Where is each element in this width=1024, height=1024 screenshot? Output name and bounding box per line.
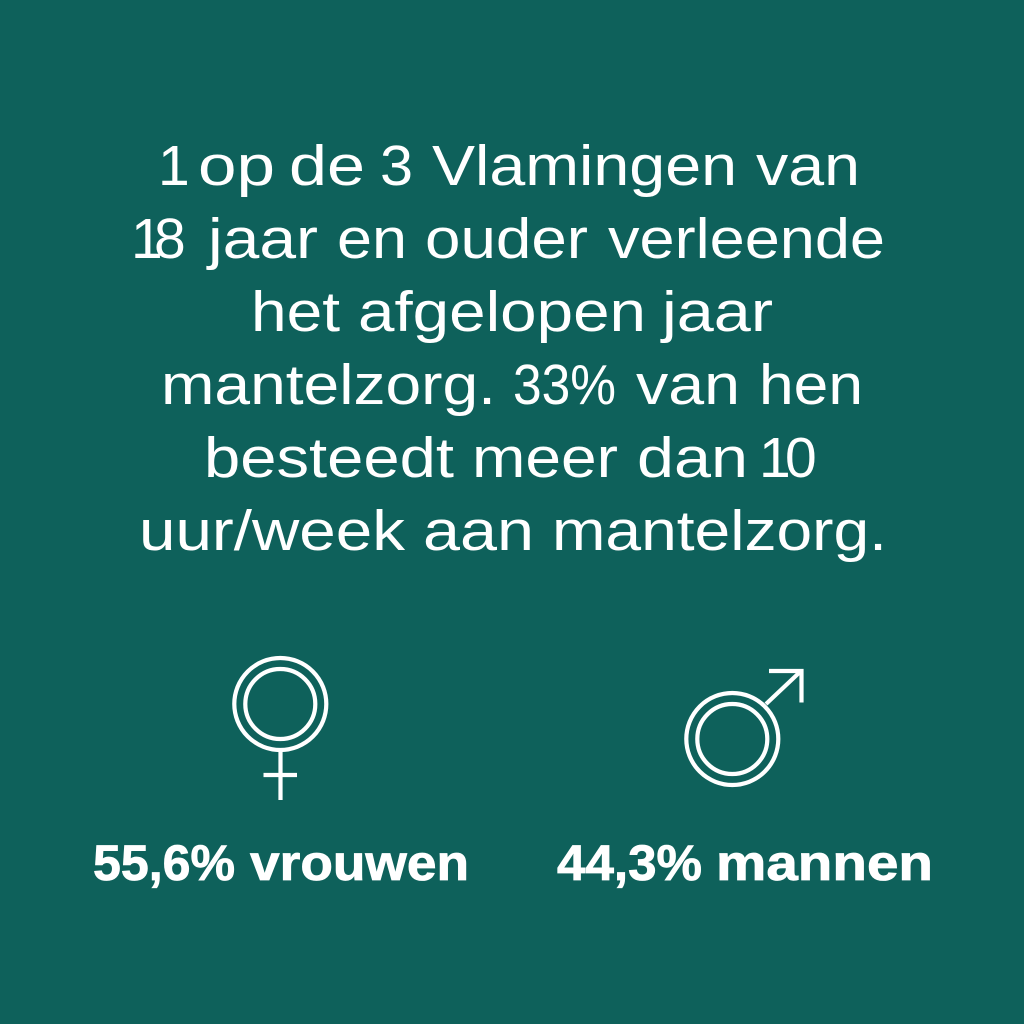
icon: female symbol — [234, 658, 326, 800]
main statement text: 33% — [513, 353, 616, 417]
main statement text: aan — [423, 499, 534, 563]
main statement text: en — [337, 207, 407, 271]
label: men percentage — [557, 835, 933, 891]
main statement text: de — [289, 134, 365, 198]
main statement text: meer — [472, 426, 618, 490]
main statement text: besteedt — [204, 426, 454, 490]
main statement text: hen — [759, 353, 863, 417]
main statement text: afgelopen — [358, 280, 646, 344]
label: men percentage: mannen — [716, 835, 933, 891]
main statement text: op — [198, 134, 275, 198]
main statement text: mantelzorg. — [552, 499, 887, 563]
main statement text: 3 — [380, 134, 413, 198]
main statement text: jaar — [660, 280, 773, 344]
main statement text: Vlamingen — [432, 134, 737, 198]
main statement text: uur/week — [139, 499, 406, 563]
main statement text: het — [251, 280, 340, 344]
main statement text: van — [756, 134, 860, 198]
main statement text: 10 — [759, 426, 817, 490]
main statement text: ouder — [425, 207, 588, 271]
main statement text: mantelzorg. — [161, 353, 496, 417]
main statement text: verleende — [608, 207, 885, 271]
main statement text: van — [636, 353, 740, 417]
main statement text: 18 — [131, 207, 186, 271]
label: women percentage: vrouwen — [250, 835, 469, 891]
icon: male symbol — [686, 671, 802, 785]
label: women percentage — [93, 835, 469, 891]
label: men percentage: 44,3% — [557, 835, 702, 891]
main statement text: 1 — [158, 134, 190, 198]
main statement text: dan — [637, 426, 748, 490]
main statement text: jaar — [206, 207, 318, 271]
label: women percentage: 55,6% — [93, 835, 235, 891]
main statement text — [131, 134, 887, 563]
